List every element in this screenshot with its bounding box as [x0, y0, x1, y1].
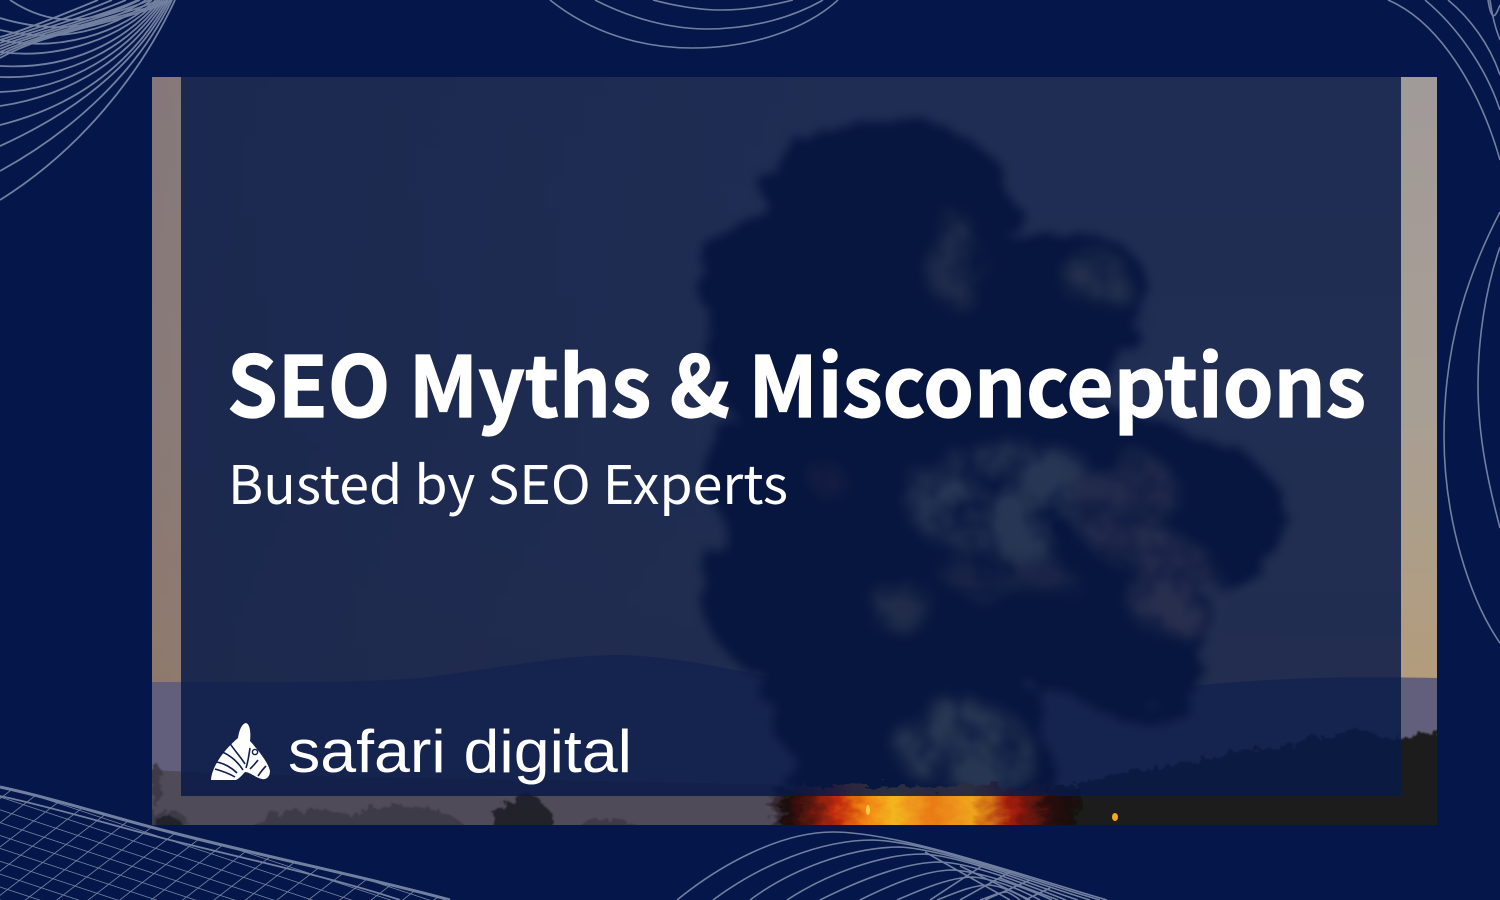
- wave lines: top left: [0, 0, 175, 200]
- translucent navy panel: [181, 77, 1401, 796]
- smoke cloud: [700, 120, 1280, 800]
- near ground haze: [152, 770, 800, 825]
- wire mesh: bottom centre: [677, 832, 1107, 900]
- title: SEO Myths & Misconceptions: [227, 321, 1366, 442]
- wordmark: safari digital: [288, 718, 632, 785]
- photo: explosion at dusk: [148, 77, 1460, 860]
- distant hills: [152, 655, 1437, 788]
- glowing patches inside smoke: [818, 212, 1220, 794]
- logo: safari digital: [211, 718, 632, 785]
- wave lines: top centre: [550, 0, 838, 48]
- dark forest right: [1065, 728, 1437, 825]
- fire base: [770, 786, 1080, 836]
- subtitle: Busted by SEO Experts: [228, 444, 788, 520]
- sky: [152, 77, 1437, 687]
- icon: zebra head: [211, 723, 270, 780]
- wave lines: right: [1388, 0, 1500, 643]
- treeline left: [152, 762, 636, 825]
- dark tree: [155, 796, 554, 825]
- wire mesh: bottom left: [0, 780, 460, 900]
